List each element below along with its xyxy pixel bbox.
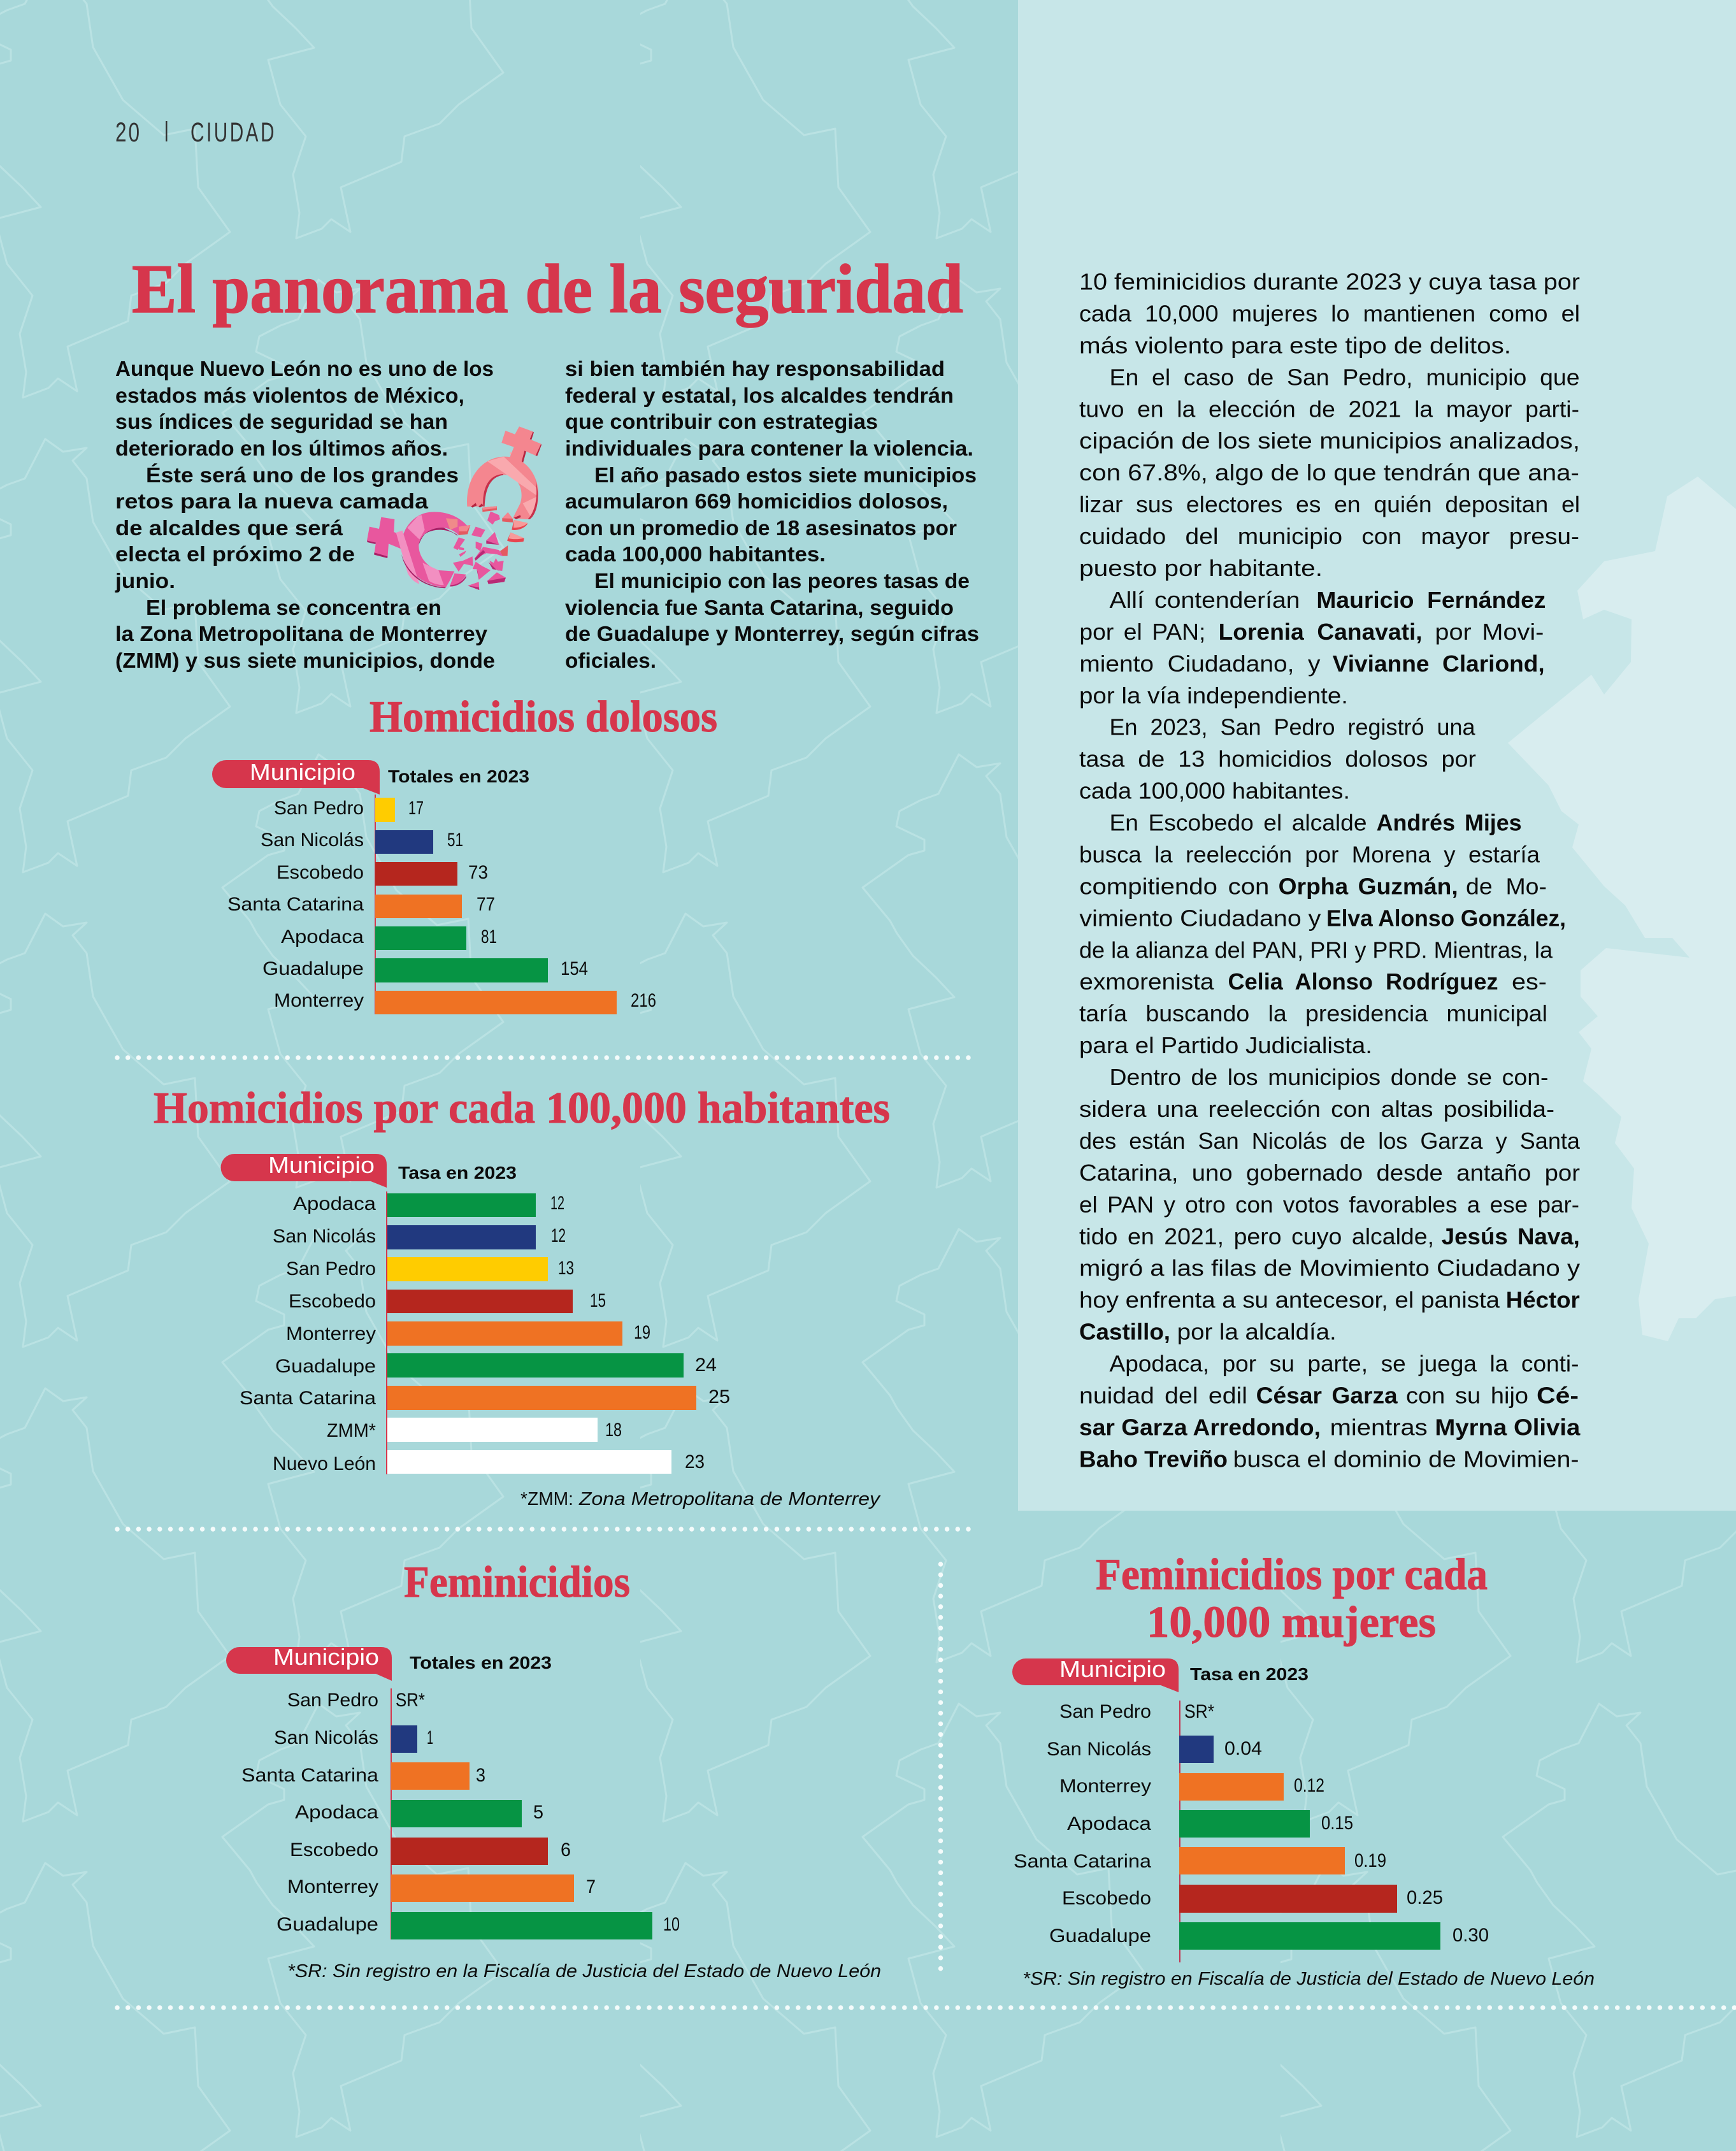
row: Monterrey 216: 216 [631, 990, 656, 1011]
row: San Nicolás 0.04: 0.04 [1224, 1738, 1262, 1759]
row: Guadalupe 0.30 [1049, 1922, 1489, 1950]
text block: right article column: Allí contenderían [1110, 587, 1300, 613]
row: San Pedro 17 [274, 798, 424, 822]
row: San Pedro SR [1059, 1701, 1214, 1722]
text block: right article column: En Escobedo el alcalde [1110, 809, 1367, 836]
text block: right article column: Cé- [1537, 1383, 1579, 1408]
text block: intro column 1: deteriorado en los últimos años. [115, 436, 448, 460]
text block: right article column: cipación de los siete municipios analizados, [1079, 428, 1580, 454]
text block: intro column 1: Éste será uno de los grandes [146, 463, 459, 487]
text block: right article column: Myrna Olivia [1435, 1414, 1581, 1440]
header tag: Municipio: Municipio [268, 1152, 375, 1178]
row: San Pedro 17: 17 [408, 798, 424, 819]
bar chart: Homicidios dolosos [212, 759, 656, 1014]
row: Guadalupe 0.30: 0.30 [1453, 1925, 1489, 1946]
text block: right article column: con 67.8%, algo de lo que tendrán que ana- [1079, 459, 1579, 486]
footnote: SR Feminicidios: *SR: Sin registro en la Fiscalía de Justicia del Estado de Nuevo León [287, 1961, 881, 1982]
row: ZMM* 18: ZMM* [327, 1420, 376, 1441]
text block: right article column: por la alcaldía. [1177, 1319, 1337, 1345]
text block: right article column: con su hijo [1406, 1383, 1528, 1408]
row: San Pedro SR: San Pedro [287, 1690, 378, 1711]
row: Santa Catarina 3: Santa Catarina [241, 1765, 378, 1786]
row: Apodaca 12: Apodaca [293, 1193, 376, 1214]
text block: right article column: por la vía independiente. [1079, 682, 1348, 709]
text block: right article column: por Movi- [1435, 619, 1544, 645]
row: Guadalupe 154: 154 [561, 958, 588, 979]
row: Apodaca 5 [295, 1800, 543, 1827]
row: Monterrey 7 [287, 1874, 596, 1902]
footnote: ZMM: Zona Metropolitana de Monterrey [578, 1489, 881, 1509]
row: Santa Catarina 0.19: Santa Catarina [1014, 1851, 1151, 1872]
title: El panorama de la seguridad [132, 250, 963, 327]
text block: right article column: hoy enfrenta a su antecesor, el panista [1079, 1287, 1500, 1313]
heading: Feminicidios: Feminicidios [404, 1558, 630, 1607]
row: Monterrey 19: Monterrey [286, 1323, 376, 1344]
text block: right article column: tuvo en la elección de 2021 la mayor parti- [1079, 396, 1579, 422]
row: Monterrey 19 [286, 1321, 650, 1346]
text block: right article column: puesto por habitante. [1079, 555, 1323, 581]
row: Escobedo 73: Escobedo [276, 862, 364, 883]
text block: right article column: 10 feminicidios durante 2023 y cuya tasa por [1079, 269, 1580, 294]
text block: right article column: Mauricio Fernández [1316, 587, 1546, 613]
text block: right article column: de Mo- [1466, 873, 1547, 899]
row: San Pedro 17: San Pedro [274, 798, 364, 819]
row: San Nicolás 1: 1 [427, 1727, 433, 1748]
row: Guadalupe 10: Guadalupe [276, 1914, 378, 1935]
row: San Pedro 13: San Pedro [286, 1258, 376, 1279]
text block: right article column: de la alianza del PAN, PRI y PRD. Mientras, la [1079, 937, 1553, 963]
text block: right article column: Apodaca, por su parte, se juega la conti- [1110, 1351, 1579, 1377]
row: ZMM* 18 [327, 1418, 622, 1442]
panel: right article column [1018, 0, 1736, 1511]
heading: Homicidios por cada 100,000 habitantes: Homicidios por cada 100,000 habitantes [154, 1084, 890, 1133]
text block: right article column: cada 10,000 mujeres lo mantienen como el [1079, 301, 1580, 326]
text block: right article column: Elva Alonso González, [1326, 905, 1566, 931]
row: Apodaca 81 [281, 926, 497, 950]
text block: right article column: Celia Alonso Rodríguez [1228, 968, 1498, 995]
text block: right article column: taría buscando la presidencia municipal [1079, 1000, 1547, 1026]
row: Guadalupe 10 [276, 1912, 680, 1939]
row: Guadalupe 0.30: Guadalupe [1049, 1925, 1151, 1946]
row: Santa Catarina 77: Santa Catarina [227, 894, 364, 915]
axis [1179, 1701, 1180, 1962]
bar chart: Feminicidios por cada 10,000 mujeres [1012, 1656, 1489, 1962]
text block: intro column 1: retos para la nueva camada [115, 489, 429, 513]
row: Monterrey 19: 19 [634, 1322, 650, 1343]
row: San Nicolás 0.04 [1047, 1736, 1262, 1763]
row: Santa Catarina 25 [240, 1386, 730, 1410]
row: Santa Catarina 3: 3 [476, 1765, 485, 1786]
row: San Nicolás 51: San Nicolás [261, 830, 364, 851]
row: Monterrey 7: Monterrey [287, 1876, 378, 1897]
text block: right article column: Dentro de los municipios donde se con- [1110, 1064, 1548, 1090]
header tag: Municipio [212, 759, 380, 795]
row: Santa Catarina 0.19 [1014, 1847, 1386, 1874]
header tag: Municipio: Municipio [250, 759, 355, 785]
text block: intro column 2 [565, 357, 979, 672]
text block: right article column: vimiento Ciudadano y [1079, 905, 1321, 931]
text block: intro column 2: El año pasado estos siete municipios [594, 463, 977, 487]
text block: right article column: Lorenia Canavati, [1219, 619, 1423, 645]
row: Monterrey 0.12: Monterrey [1059, 1776, 1151, 1797]
text block: right article column: por el PAN; [1079, 619, 1205, 645]
row: San Nicolás 12: San Nicolás [273, 1226, 376, 1247]
row: Apodaca 0.15 [1067, 1810, 1353, 1838]
text block: right article column: César Garza [1256, 1383, 1398, 1408]
row: Apodaca 12 [293, 1193, 564, 1217]
text block: right article column [1079, 269, 1581, 1472]
heading: Feminicidios por cada 10,000 mujeres: 10,000 mujeres [1147, 1598, 1436, 1647]
row: Monterrey 216: Monterrey [274, 990, 364, 1011]
text block: intro column 1 [115, 357, 495, 672]
row: San Nicolás 1: San Nicolás [274, 1727, 378, 1748]
text block: intro column 2: violencia fue Santa Catarina, seguido [565, 596, 954, 619]
text block: right article column: exmorenista [1079, 968, 1214, 995]
text block: right article column: para el Partido Judicialista. [1079, 1032, 1372, 1058]
bar chart: Feminicidios [226, 1644, 680, 1939]
row: San Nicolás 1 [274, 1725, 433, 1753]
row: San Nicolás 12: 12 [551, 1225, 566, 1246]
row: Monterrey 0.12: 0.12 [1294, 1775, 1324, 1796]
row: Escobedo 6 [290, 1838, 571, 1865]
text block: intro column 2: con un promedio de 18 asesinatos por [565, 516, 957, 540]
row: Apodaca 12: 12 [550, 1193, 564, 1214]
row: Santa Catarina 77 [227, 894, 495, 918]
row: Guadalupe 24 [275, 1353, 717, 1378]
row: Guadalupe 24: Guadalupe [275, 1356, 376, 1377]
row: San Pedro SR [287, 1690, 425, 1711]
text block: intro column 1: junio. [115, 569, 175, 593]
row: San Nicolás 51: 51 [447, 830, 463, 851]
row: Guadalupe 154: Guadalupe [262, 958, 364, 979]
text block: right article column: nuidad del edil [1079, 1383, 1247, 1408]
row: San Nicolás 12 [273, 1225, 566, 1249]
column header: Totales en 2023 [410, 1653, 552, 1673]
row: Guadalupe 24: 24 [695, 1355, 717, 1376]
heading: Feminicidios por cada 10,000 mujeres [1096, 1550, 1488, 1647]
text block: right article column: Catarina, uno gobernado desde antaño por [1079, 1160, 1580, 1186]
row: Guadalupe 10: 10 [663, 1914, 680, 1935]
row: Monterrey 216 [274, 990, 656, 1014]
text block: right article column: tasa de 13 homicidios dolosos por [1079, 746, 1476, 772]
row: Nuevo León 23: 23 [685, 1451, 705, 1472]
text block: intro column 2: de Guadalupe y Monterrey, según cifras [565, 622, 979, 645]
text block: intro column 2: federal y estatal, los alcaldes tendrán [565, 384, 954, 407]
panel map silhouette [1508, 477, 1736, 1341]
row: Santa Catarina 77: 77 [477, 894, 495, 915]
text block: right article column: des están San Nicolás de los Garza y Santa [1079, 1128, 1581, 1154]
text block: intro column 1: El problema se concentra en [146, 596, 441, 619]
text block: intro column 2: acumularon 669 homicidios dolosos, [565, 489, 948, 513]
row: San Pedro SR: SR* [1184, 1701, 1214, 1722]
row: Santa Catarina 0.19: 0.19 [1354, 1850, 1386, 1871]
row: Apodaca 5: 5 [533, 1802, 543, 1823]
text block: intro column 1: de alcaldes que será [115, 516, 343, 540]
row: Apodaca 0.15: 0.15 [1321, 1813, 1353, 1834]
row: Escobedo 15: Escobedo [289, 1291, 376, 1312]
row: San Pedro 13 [286, 1257, 574, 1281]
column header: Tasa en 2023 [398, 1163, 517, 1183]
column header: Totales en 2023 [388, 766, 529, 786]
page header: folio and section [115, 117, 276, 148]
text block: right article column: busca la reelección por Morena y estaría [1079, 841, 1540, 868]
axis [375, 795, 376, 1014]
row: Monterrey 0.12 [1059, 1773, 1324, 1801]
text block: right article column: cada 100,000 habitantes. [1079, 778, 1350, 804]
header tag: Municipio: Municipio [1059, 1656, 1166, 1682]
header tag: Municipio [1012, 1656, 1179, 1692]
text block: intro column 2: cada 100,000 habitantes. [565, 542, 826, 566]
text block: intro column 1: electa el próximo 2 de [115, 542, 355, 566]
text block: right article column: Orpha Guzmán, [1279, 873, 1458, 899]
text block: intro column 2: que contribuir con estrategias [565, 410, 878, 433]
text block: right article column: sidera una reelección con altas posibilida- [1079, 1096, 1554, 1122]
text block: right article column: lizar sus electores es en quién depositan el [1079, 491, 1580, 517]
bar chart: Homicidios por cada 100,000 habitantes [220, 1152, 730, 1474]
text block: right article column: sar Garza Arredondo, [1079, 1414, 1321, 1440]
text block: right article column: cuidado del municipio con mayor presu- [1079, 523, 1579, 549]
page header: folio and section: CIUDAD [190, 117, 276, 148]
row: San Nicolás 0.04: San Nicolás [1047, 1739, 1151, 1760]
row: San Nicolás 51 [261, 830, 463, 854]
row: Santa Catarina 25: 25 [708, 1386, 730, 1407]
text block: right article column: Andrés Mijes [1377, 809, 1522, 836]
footnote: SR Feminicidios por cada 10,000 mujeres: *SR: Sin registro en Fiscalía de Justicia del Estado de Nuevo León [1022, 1969, 1595, 1989]
text block: intro column 2: El municipio con las peores tasas de [594, 569, 970, 593]
row: Escobedo 6: 6 [561, 1839, 571, 1860]
heading: Feminicidios por cada 10,000 mujeres: Feminicidios por cada [1096, 1550, 1488, 1599]
header tag: Municipio [226, 1644, 392, 1681]
row: Apodaca 5: Apodaca [295, 1802, 378, 1823]
row: ZMM* 18: 18 [605, 1420, 622, 1441]
text block: intro column 1: Aunque Nuevo León no es uno de los [115, 357, 494, 380]
text block: right article column: miento Ciudadano, y [1079, 651, 1320, 677]
footnote: ZMM: *ZMM: [520, 1489, 573, 1509]
row: Escobedo 15 [289, 1290, 606, 1313]
header tag: Municipio: Municipio [273, 1644, 379, 1670]
row: San Pedro SR: SR* [396, 1690, 425, 1711]
row: Santa Catarina 3 [241, 1762, 485, 1790]
text block: intro column 1: la Zona Metropolitana de Monterrey [115, 622, 488, 645]
heading: Homicidios dolosos: Homicidios dolosos [369, 693, 717, 742]
row: Escobedo 73: 73 [468, 862, 488, 883]
header tag: Municipio [220, 1152, 387, 1188]
text block: right article column: el PAN y otro con votos favorables a ese par- [1079, 1191, 1579, 1218]
text block: right article column: Castillo, [1079, 1319, 1170, 1345]
row: San Pedro SR: San Pedro [1059, 1701, 1151, 1722]
page header: folio and section: 20 [115, 117, 141, 148]
row: Escobedo 0.25: Escobedo [1062, 1888, 1151, 1909]
text block: right article column: En el caso de San Pedro, municipio que [1110, 364, 1580, 390]
row: Apodaca 81: Apodaca [281, 926, 364, 947]
row: San Pedro 13: 13 [558, 1258, 574, 1279]
text block: right article column: mientras [1330, 1414, 1428, 1440]
text block: right article column: es- [1512, 968, 1547, 995]
row: Guadalupe 154 [262, 958, 588, 982]
row: Escobedo 0.25 [1062, 1885, 1443, 1913]
row: Escobedo 0.25: 0.25 [1407, 1887, 1443, 1908]
row: Apodaca 81: 81 [481, 926, 497, 947]
axis [391, 1688, 392, 1939]
row: Nuevo León 23: Nuevo León [273, 1453, 376, 1474]
text block: right article column: Vivianne Clariond, [1333, 651, 1545, 677]
text block: right article column: compitiendo con [1079, 873, 1269, 899]
text block: right article column: más violento para este tipo de delitos. [1079, 332, 1511, 358]
text block: intro column 1: sus índices de seguridad se han [115, 410, 448, 433]
text block: intro column 2: individuales para contener la violencia. [565, 436, 973, 460]
row: Monterrey 7: 7 [586, 1876, 596, 1897]
row: Nuevo León 23 [273, 1450, 705, 1474]
text block: right article column: busca el dominio de Movimien- [1233, 1446, 1579, 1472]
axis [386, 1191, 387, 1474]
text block: right article column: En 2023, San Pedro registró una [1110, 714, 1475, 740]
text block: intro column 2: oficiales. [565, 649, 656, 672]
text block: intro column 1: estados más violentos de México, [115, 384, 464, 407]
text block: right article column: Jesús Nava, [1442, 1223, 1580, 1249]
text block: right article column: migró a las filas de Movimiento Ciudadano y [1079, 1255, 1580, 1281]
text block: right article column: Héctor [1506, 1287, 1580, 1313]
column header: Tasa en 2023 [1190, 1664, 1309, 1684]
text block: intro column 1: (ZMM) y sus siete municipios, donde [115, 649, 495, 672]
row: Escobedo 73 [276, 862, 488, 886]
row: Escobedo 15: 15 [590, 1290, 606, 1311]
text block: right article column: Baho Treviño [1079, 1446, 1228, 1472]
icon: broken female symbols [367, 426, 542, 590]
row: Escobedo 6: Escobedo [290, 1839, 378, 1860]
row: Apodaca 0.15: Apodaca [1067, 1813, 1151, 1834]
row: Santa Catarina 25: Santa Catarina [240, 1388, 376, 1409]
text block: intro column 2: si bien también hay responsabilidad [565, 357, 945, 380]
text block: right article column: tido en 2021, pero cuyo alcalde, [1079, 1223, 1434, 1249]
